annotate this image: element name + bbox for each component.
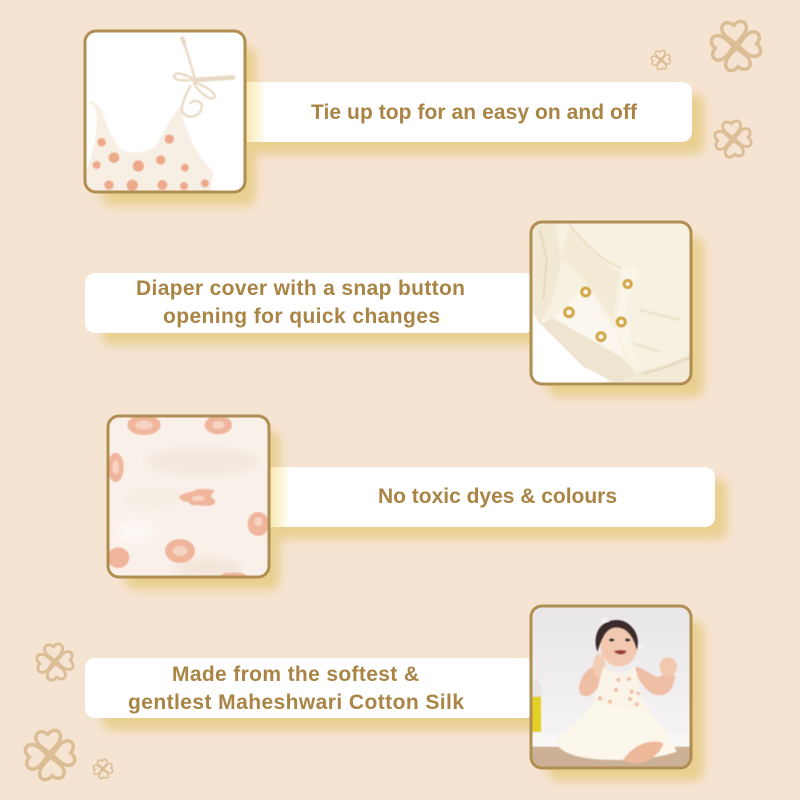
label [128, 663, 464, 714]
panel: tie up top [83, 31, 704, 206]
icon: clover large top right [710, 20, 762, 72]
panel: diaper cover [85, 222, 704, 397]
text bar [270, 467, 715, 527]
label: gentlest Maheshwari Cotton Silk [128, 691, 464, 714]
panel: softest cotton silk [85, 606, 704, 781]
shadow [102, 237, 704, 397]
label: opening for quick changes [163, 305, 440, 328]
photo: tie-up dress top [83, 31, 245, 193]
photo frame [531, 606, 691, 768]
label: Made from the softest & [172, 663, 419, 686]
icon: clover small top [651, 50, 671, 70]
photo: baby in dress [530, 606, 693, 770]
label: Tie up top for an easy on and off [311, 101, 638, 124]
shadow [102, 621, 704, 781]
label: No toxic dyes & colours [378, 485, 617, 508]
photo frame [108, 416, 269, 577]
photo frame [85, 31, 245, 192]
shadow [125, 431, 727, 590]
label: Diaper cover with a snap button [136, 277, 465, 300]
icon: clover medium left [36, 643, 74, 681]
label [136, 277, 465, 328]
panel: no toxic dyes [107, 415, 727, 590]
icon: clover small bottom [93, 759, 113, 779]
icon: clover medium right [714, 120, 752, 158]
icon: clover large bottom left [24, 729, 76, 781]
photo frame [531, 222, 691, 384]
photo: embroidered fabric [107, 415, 269, 579]
text bar [85, 273, 535, 333]
text bar [85, 658, 535, 718]
text bar [246, 82, 692, 142]
photo: snap buttons [531, 222, 692, 384]
shadow [102, 46, 704, 206]
